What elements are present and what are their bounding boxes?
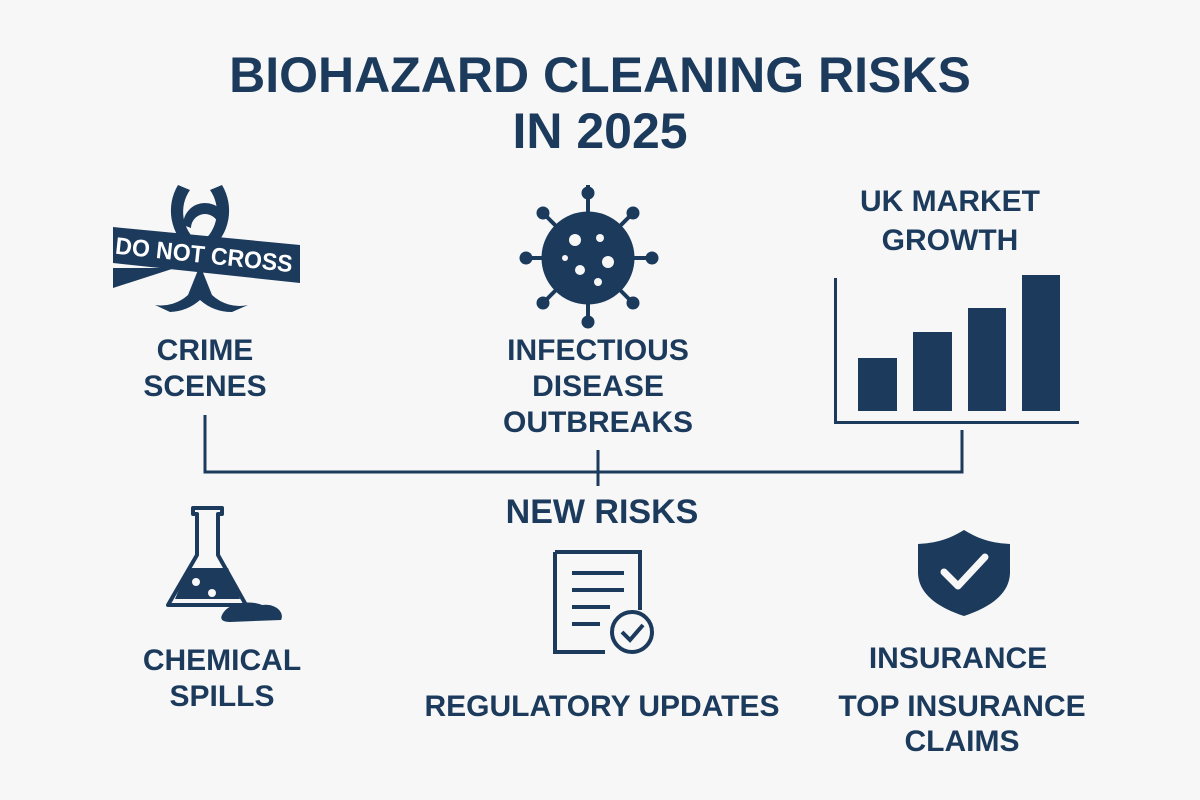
title: BIOHAZARD CLEANING RISKS [229,47,971,103]
heading: new risks: NEW RISKS [506,493,698,531]
label: crime scenes: CRIME [157,334,253,367]
icon: virus [520,185,658,328]
label: insurance [838,642,1086,758]
label: crime scenes: SCENES [143,370,267,403]
label: infectious disease outbreaks: DISEASE [532,370,664,403]
heading: uk market growth: UK MARKET [860,185,1040,218]
label: insurance: TOP INSURANCE [838,690,1086,723]
label: insurance: CLAIMS [904,725,1020,758]
label: chemical spills: SPILLS [169,680,275,713]
label: crime scenes [143,334,267,403]
title: IN 2025 [512,103,688,159]
icon: regulatory document [555,552,652,652]
heading: uk market growth: GROWTH [882,224,1018,257]
label: chemical spills [143,644,301,713]
heading: uk market growth [860,185,1040,257]
label: infectious disease outbreaks: OUTBREAKS [503,406,693,439]
title [229,47,971,159]
label: infectious disease outbreaks: INFECTIOUS [507,334,689,367]
icon: biohazard with do not cross tape: DO NOT CROSS [114,233,294,278]
icon: shield check [918,530,1010,616]
bar chart [834,275,1079,424]
label: regulatory updates: REGULATORY UPDATES [424,690,780,723]
label: chemical spills: CHEMICAL [143,644,301,677]
icon: biohazard with do not cross tape [113,185,300,312]
connector lines [205,415,962,486]
label: infectious disease outbreaks [503,334,693,439]
icon: flask spill [168,508,282,622]
label: insurance: INSURANCE [869,642,1047,675]
